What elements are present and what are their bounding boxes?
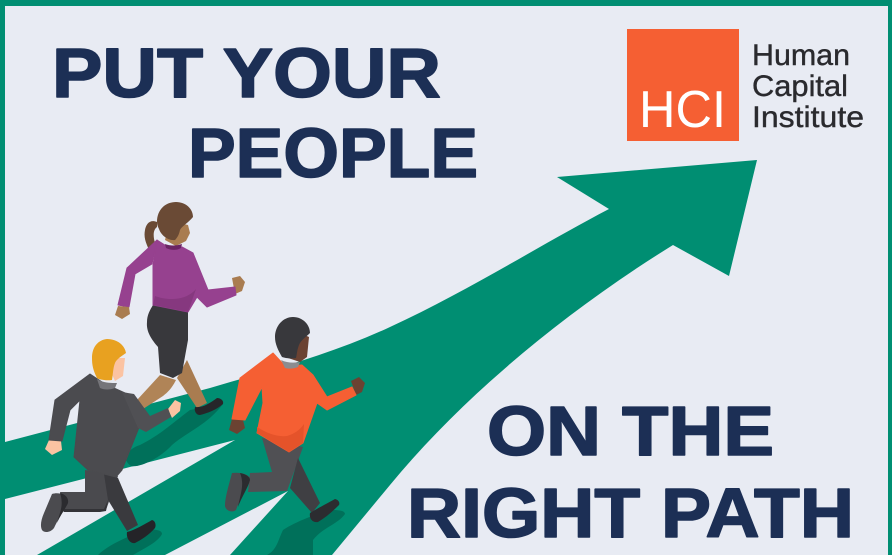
arrow: branching green path [5, 160, 757, 555]
shadow [267, 510, 345, 555]
logo: Human Capital Institute: HCI [639, 81, 726, 139]
front leg [290, 458, 320, 513]
trailing shoe [225, 473, 250, 511]
left hand [45, 440, 62, 455]
logo: Human Capital Institute: Institute [752, 101, 864, 134]
collar [97, 379, 117, 390]
hair [275, 317, 310, 358]
collar [281, 360, 300, 369]
right hand [232, 276, 245, 294]
face [110, 358, 125, 381]
trailing leg [60, 470, 118, 511]
heading: on the right path: ON THE [487, 392, 774, 470]
front shoe [127, 520, 156, 543]
logo: Human Capital Institute: Capital [752, 70, 848, 103]
trailing leg [248, 438, 303, 492]
shadow [98, 530, 162, 555]
left hand [229, 419, 245, 434]
left arm [118, 240, 157, 307]
neck and face [165, 222, 190, 246]
shadow [126, 404, 223, 466]
back leg [137, 375, 176, 409]
front leg [104, 474, 138, 531]
sweater and arms [232, 353, 356, 452]
figure: man running in orange [225, 317, 365, 555]
heading: on the right path [407, 392, 854, 552]
heading: on the right path: RIGHT PATH [407, 474, 854, 552]
heading: put your people [52, 34, 478, 192]
front leg [177, 360, 207, 408]
heading: put your people: PUT YOUR [52, 34, 441, 112]
right sleeve [122, 392, 171, 432]
hair [157, 202, 193, 240]
right hand [351, 377, 365, 395]
back shoe [128, 422, 136, 436]
right hand [168, 400, 181, 418]
shoe [195, 398, 223, 415]
hair [92, 339, 126, 380]
suit jacket [49, 374, 140, 477]
heading: put your people: PEOPLE [188, 114, 478, 192]
face [288, 333, 309, 362]
torso and right arm [153, 240, 236, 312]
logo: Human Capital Institute: Human [752, 39, 850, 72]
collar [165, 244, 182, 250]
logo: Human Capital Institute [627, 29, 864, 141]
ponytail [145, 221, 157, 265]
trailing shoe [41, 493, 68, 532]
figure: man running in grey suit [41, 339, 181, 555]
left hand [115, 306, 130, 319]
front shoe [310, 499, 339, 522]
figure: woman running in purple [115, 202, 245, 466]
skirt [147, 305, 188, 378]
